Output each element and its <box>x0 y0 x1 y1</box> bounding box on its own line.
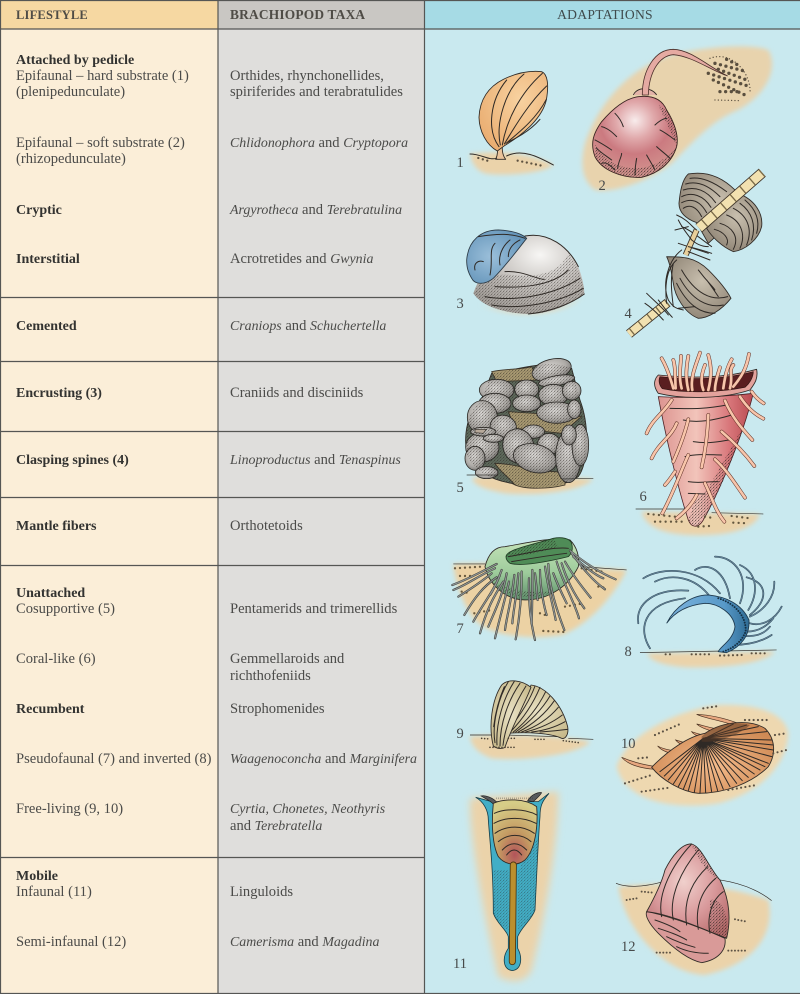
header: brachiopod taxa: BRACHIOPOD TAXA <box>230 7 365 22</box>
column: lifestyle background <box>0 0 218 994</box>
lifestyle column text: Coral-like (6) <box>16 651 96 667</box>
taxa column text: Camerisma and Magadina <box>230 934 380 950</box>
illustration 10: free-living orange shell with spines <box>617 705 788 806</box>
illustration 4: shells clasping a crinoid stem with spines <box>629 173 762 334</box>
lifestyle column text: Recumbent <box>16 702 85 717</box>
illustration 3: encrusting blue shell on grey host shell <box>467 230 584 314</box>
figure numbers: 9 <box>456 726 464 742</box>
lifestyle column text <box>16 53 212 950</box>
lifestyle column text: Attached by pedicle <box>16 53 134 68</box>
lifestyle column text: (rhizopedunculate) <box>16 151 126 167</box>
lifestyle column text: Mantle fibers <box>16 519 97 534</box>
taxa column text: Orthotetoids <box>230 518 303 534</box>
lifestyle column text: Interstitial <box>16 252 80 267</box>
header: lifestyle: LIFESTYLE <box>16 8 88 22</box>
taxa column text: Orthides, rhynchonellides, <box>230 68 384 84</box>
illustration 7: pseudofaunal green shell with spines in sediment <box>452 538 627 640</box>
illustration 2: rhizopedunculate shell with rootlet pedicle <box>582 46 772 191</box>
figure numbers: 5 <box>456 480 464 496</box>
illustration 11: infaunal lingulid in burrow <box>470 792 558 981</box>
figure numbers: 6 <box>640 489 647 505</box>
figure numbers: 11 <box>453 956 467 972</box>
lifestyle column text: Mobile <box>16 869 58 884</box>
figure numbers: 3 <box>456 296 464 312</box>
taxa column text: Linoproductus and Tenaspinus <box>229 452 401 468</box>
taxa column text: Craniops and Schuchertella <box>230 318 386 334</box>
column: brachiopod taxa background <box>218 0 424 994</box>
taxa column text: Strophomenides <box>230 701 325 717</box>
illustration 9: free-living ribbed tan shell <box>470 681 593 759</box>
taxa column text: Cyrtia, Chonetes, Neothyris <box>230 802 385 817</box>
figure numbers: 4 <box>624 306 632 322</box>
lifestyle column text: Epifaunal – soft substrate (2) <box>16 135 185 151</box>
figure numbers: 10 <box>621 736 636 752</box>
taxa column text: spiriferides and terabratulides <box>230 84 403 100</box>
illustration 6: coral-like conical shell with spines <box>636 353 764 535</box>
illustration 1: plenipedunculate shell on hard substrate <box>470 71 553 175</box>
lifestyle column text: Cosupportive (5) <box>16 601 115 617</box>
figure numbers: 1 <box>456 155 464 171</box>
lifestyle column text: Cemented <box>16 319 77 334</box>
taxa column text: Acrotretides and Gwynia <box>230 251 373 267</box>
illustration 12: semi-infaunal pink shell <box>616 844 772 975</box>
lifestyle column text: Semi-infaunal (12) <box>16 934 126 950</box>
taxa column text: Argyrotheca and Terebratulina <box>229 202 402 218</box>
figure numbers <box>453 155 647 972</box>
taxa column text: Linguloids <box>230 884 293 900</box>
taxa column text: Pentamerids and trimerellids <box>230 601 398 617</box>
figure numbers: 12 <box>621 939 636 955</box>
figure numbers: 2 <box>598 178 606 194</box>
taxa column text: richthofeniids <box>230 668 311 684</box>
taxa column text: Craniids and disciniids <box>230 385 364 401</box>
taxa column text: Waagenoconcha and Marginifera <box>230 751 417 767</box>
header: adaptations: ADAPTATIONS <box>557 7 653 22</box>
lifestyle column text: (plenipedunculate) <box>16 84 125 100</box>
figure numbers: 7 <box>456 621 464 637</box>
lifestyle column text: Free-living (9, 10) <box>16 801 123 817</box>
taxa column text: Chlidonophora and Cryptopora <box>230 135 408 151</box>
lifestyle column text: Infaunal (11) <box>16 884 92 900</box>
taxa column text: and Terebratella <box>230 818 322 834</box>
illustration 8: inverted blue crescent shell with long spines <box>638 557 782 667</box>
lifestyle column text: Epifaunal – hard substrate (1) <box>16 68 189 84</box>
lifestyle column text: Cryptic <box>16 203 62 218</box>
lifestyle column text: Encrusting (3) <box>16 386 102 401</box>
taxa column text: Gemmellaroids and <box>230 651 345 667</box>
lifestyle column text: Pseudofaunal (7) and inverted (8) <box>16 751 212 767</box>
lifestyle column text: Unattached <box>16 586 85 601</box>
illustration 5: cosupportive cluster of shells <box>465 355 593 494</box>
lifestyle column text: Clasping spines (4) <box>16 453 129 468</box>
figure numbers: 8 <box>624 644 632 660</box>
taxa column text <box>229 68 417 950</box>
column: adaptations header background <box>424 0 800 29</box>
